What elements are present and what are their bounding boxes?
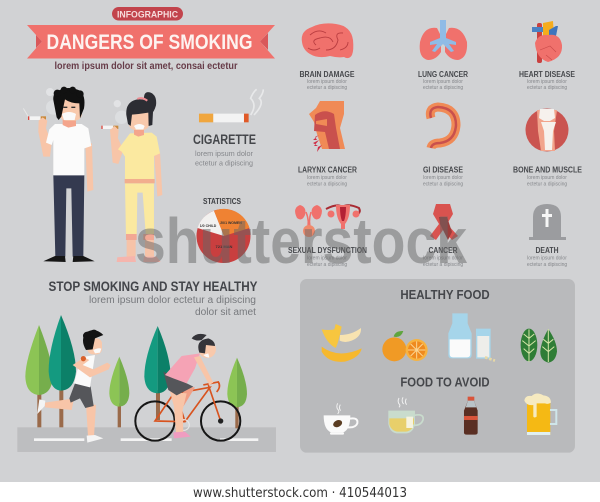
organ: sexual dysfunction: lorem ipsum dolor [307,256,347,262]
organ: brain damage: ectetur a dipiscing [307,85,347,91]
icon: coffee [324,403,357,435]
organ: gi disease: ectetur a dipiscing [423,182,463,188]
trees [25,315,247,428]
icon: banana [322,324,362,362]
organ: cancer [423,204,463,268]
organ: gi disease [423,107,464,188]
organ: bone and muscle: lorem ipsum dolor [527,175,567,181]
icon: bone in circle [526,108,568,152]
icon: gravestone [529,204,566,240]
organ: cancer: CANCER [428,246,458,255]
organ: sexual dysfunction: SEXUAL DYSFUNCTION [288,246,367,255]
cigarette text: lorem ipsum dolor [195,151,254,158]
icon: spinach leaves [521,329,557,363]
organ: lung cancer: lorem ipsum dolor [423,79,463,85]
icon: oranges [382,331,428,361]
organ: cancer: lorem ipsum dolor [423,256,463,262]
icon: cigarette [199,89,263,122]
healthy food heading: HEALTHY FOOD [400,287,490,302]
cigarette text [195,151,254,168]
organ: sexual dysfunction [288,205,367,268]
icon: heart [532,21,562,63]
organ: cancer: ectetur a dipiscing [423,262,463,268]
food to avoid heading: FOOD TO AVOID [400,374,490,389]
organ: larynx cancer [298,101,357,188]
stop smoking text [89,295,256,318]
organ: brain damage: lorem ipsum dolor [307,79,347,85]
title banner [27,25,275,58]
subtitle: lorem ipsum dolor sit amet, consai ectetur [54,61,238,72]
organ: bone and muscle [513,108,583,188]
organ: heart disease: HEART DISEASE [519,70,576,79]
stop smoking text: dolor sit amet [195,307,256,318]
title banner: DANGERS OF SMOKING [46,30,252,54]
organ: lung cancer [418,20,468,91]
footer: www.shutterstock.com · 410544013 [193,486,407,501]
organ: brain damage [300,23,355,91]
icon: lungs [420,20,467,60]
organ: gi disease: lorem ipsum dolor [423,175,463,181]
organ: death: ectetur a dipiscing [527,262,567,268]
organ: sexual dysfunction: ectetur a dipiscing [307,262,347,268]
organ: larynx cancer: LARYNX CANCER [298,166,357,174]
footer [0,482,600,502]
icon: gi tract [430,107,456,148]
infographic pill label: INFOGRAPHIC [117,10,178,20]
illustration: smoking man [23,87,95,262]
runner [37,330,111,443]
organ: brain damage: BRAIN DAMAGE [300,70,355,79]
stop smoking text: lorem ipsum dolor ectetur a dipiscing [89,295,256,306]
cigarette heading: CIGARETTE [193,132,256,147]
pie chart: 20/1 WOMEN [220,221,242,225]
icon: beer mug [524,393,556,435]
bicycle [135,382,240,441]
organ: gi disease: GI DISEASE [423,166,464,174]
organ: lung cancer: LUNG CANCER [418,70,468,79]
organ: larynx cancer: lorem ipsum dolor [307,175,347,181]
icon: milk [448,313,495,361]
organ: heart disease: ectetur a dipiscing [527,85,567,91]
cigarette text: ectetur a dipiscing [195,160,253,168]
icon: cola bottle [464,397,478,435]
road [17,427,276,452]
organ: larynx cancer: ectetur a dipiscing [307,182,347,188]
organ: heart disease [519,21,576,91]
cyclist [163,334,216,438]
pie chart: 721 MAN [216,244,233,249]
pie chart [196,209,250,263]
organ: lung cancer: ectetur a dipiscing [423,85,463,91]
watermark: shutterstock [135,205,467,277]
stop smoking heading: STOP SMOKING AND STAY HEALTHY [48,279,258,294]
icon: tea [388,397,423,433]
pie chart: 1/0 CHILD [200,224,217,228]
icon: reproductive organs [295,205,360,237]
panel: food [300,279,575,453]
illustration: road with runner, cyclist and trees [17,315,276,452]
icon: brain [302,23,353,58]
icon: larynx [309,101,345,152]
organ: bone and muscle: ectetur a dipiscing [527,182,567,188]
organ: death: lorem ipsum dolor [527,256,567,262]
statistics heading: STATISTICS [203,197,242,206]
organ: heart disease: lorem ipsum dolor [527,79,567,85]
icon: ribbon [430,204,458,240]
organ: death [527,204,567,268]
organ: death: DEATH [536,246,559,255]
illustration: smoking woman [101,92,162,262]
organ: bone and muscle: BONE AND MUSCLE [513,166,583,174]
